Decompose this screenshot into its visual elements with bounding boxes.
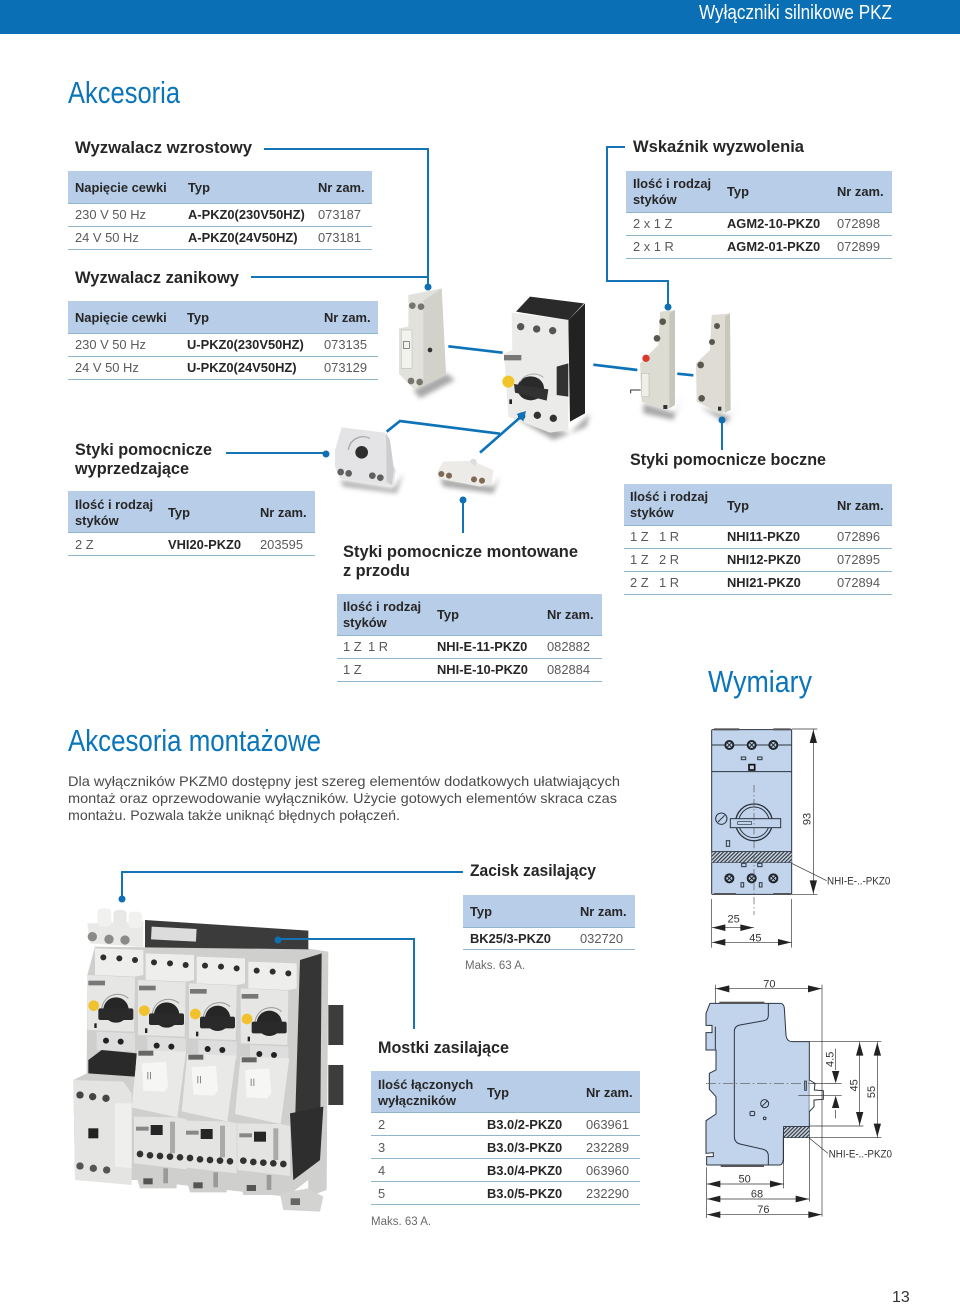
table: Styki pomocnicze montowane z przodu: Ilość i rodzaj [343, 599, 421, 614]
table: Wyzwalacz zanikowy: 230 V 50 Hz [75, 337, 146, 352]
leader: NHI-E-..-PKZ0: NHI-E-..-PKZ0 [829, 1149, 892, 1161]
paragraph [68, 773, 620, 823]
heading: Akcesoria montażowe: Akcesoria montażowe [68, 723, 321, 758]
dimension drawing: front view [712, 728, 890, 948]
heading: Styki pomocnicze boczne [630, 450, 826, 469]
table: Mostki zasilające: Maks. 63 A. [371, 1216, 431, 1228]
heading: Wskaźnik wyzwolenia [633, 137, 805, 156]
table: Wyzwalacz zanikowy: Napięcie cewki [75, 310, 167, 325]
table: Styki pomocnicze boczne: 1 R [659, 575, 679, 590]
title: Akcesoria: Akcesoria [68, 75, 181, 110]
switch side body [706, 1003, 809, 1165]
table: Wyzwalacz wzrostowy: Nr zam. [318, 180, 365, 195]
table: Mostki zasilające: B3.0/3-PKZ0 [487, 1140, 562, 1155]
photo: assembled motor starters [73, 908, 343, 1212]
dimensions: 4.5, 45, 55 [798, 1042, 881, 1138]
photo: side auxiliary contact left [631, 310, 675, 410]
table: Wyzwalacz zanikowy: U-PKZ0(24V50HZ) [187, 360, 297, 375]
table: Wyzwalacz zanikowy: U-PKZ0(230V50HZ) [187, 337, 304, 352]
header bar [0, 0, 960, 34]
table: Wskaźnik wyzwolenia: 072899 [837, 239, 880, 254]
dimensions: 4.5, 45, 55: 4.5 [824, 1052, 836, 1067]
table: Styki pomocnicze wyprzedzające: Typ [168, 505, 190, 520]
table: Zacisk zasilający: Typ [470, 904, 492, 919]
table: Styki pomocnicze wyprzedzające: Ilość i rodzaj [75, 497, 153, 512]
table: Mostki zasilające: B3.0/4-PKZ0 [487, 1163, 562, 1178]
table: Styki pomocnicze boczne: 1 Z [630, 552, 649, 567]
dimension: 70: 70 [763, 979, 775, 991]
heading: Mostki zasilające [378, 1038, 509, 1057]
dimensions: 4.5, 45, 55: 45 [848, 1079, 860, 1091]
table: Wyzwalacz wzrostowy: 24 V 50 Hz [75, 230, 139, 245]
table: Styki pomocnicze boczne: 072895 [837, 552, 880, 567]
table: Wyzwalacz zanikowy: 073129 [324, 360, 367, 375]
heading: Wyzwalacz zanikowy [75, 268, 240, 287]
table: Styki pomocnicze montowane z przodu: 082884 [547, 662, 590, 677]
table: Wyzwalacz wzrostowy: 230 V 50 Hz [75, 207, 146, 222]
table: Zacisk zasilający: Nr zam. [580, 904, 627, 919]
table: Wyzwalacz zanikowy: Typ [187, 310, 209, 325]
table: Styki pomocnicze montowane z przodu: 082882 [547, 639, 590, 654]
table: Styki pomocnicze wyprzedzające: Nr zam. [260, 505, 307, 520]
table: Styki pomocnicze montowane z przodu: 1 Z [343, 662, 362, 677]
table: Wskaźnik wyzwolenia: AGM2-10-PKZ0 [727, 216, 820, 231]
heading: Zacisk zasilający [470, 861, 597, 880]
heading: Styki pomocnicze [75, 440, 212, 459]
header title: Wyłączniki silnikowe PKZ [699, 2, 892, 24]
dimensions: 4.5, 45, 55: 55 [866, 1086, 878, 1098]
table: Styki pomocnicze boczne: 2 Z [630, 575, 649, 590]
table: Styki pomocnicze boczne [624, 450, 892, 594]
table: Wskaźnik wyzwolenia: Typ [727, 184, 749, 199]
paragraph: Dla wyłączników PKZM0 dostępny jest szereg elementów dodatkowych ułatwiających [68, 773, 620, 789]
table: Wyzwalacz wzrostowy: 073187 [318, 207, 361, 222]
contactor [73, 1050, 137, 1185]
table: Zacisk zasilający: Maks. 63 A. [465, 960, 525, 972]
table: Styki pomocnicze boczne: 072896 [837, 529, 880, 544]
table: Styki pomocnicze wyprzedzające: styków [75, 513, 120, 528]
hatched strip [712, 852, 792, 862]
table: Styki pomocnicze boczne: Ilość i rodzaj [630, 489, 708, 504]
photo: voltage release module [399, 288, 446, 390]
table: Mostki zasilające: B3.0/2-PKZ0 [487, 1117, 562, 1132]
table: Styki pomocnicze montowane z przodu: Typ [437, 607, 459, 622]
dimension: 93: 93 [802, 813, 814, 825]
table: Styki pomocnicze boczne: styków [630, 505, 675, 520]
starter columns [87, 948, 143, 1052]
power terminal [87, 908, 143, 947]
table: Wskaźnik wyzwolenia: Ilość i rodzaj [633, 176, 711, 191]
dimension: 93 [792, 729, 817, 894]
knob [736, 804, 772, 841]
leader: NHI-E-..-PKZ0 [809, 1138, 892, 1161]
table: Styki pomocnicze boczne: 1 Z [630, 529, 649, 544]
leader: NHI-E-..-PKZ0 [792, 863, 890, 887]
table: Zacisk zasilający: 032720 [580, 931, 623, 946]
table: Mostki zasilające: 5 [378, 1186, 385, 1201]
table: Styki pomocnicze montowane z przodu [337, 542, 602, 682]
table: Styki pomocnicze boczne: NHI12-PKZ0 [727, 552, 801, 567]
table: Styki pomocnicze montowane z przodu: 1 R [368, 639, 388, 654]
dimensions: 50, 68, 76: 50 [739, 1173, 751, 1185]
heading: Wyzwalacz wzrostowy [75, 138, 253, 157]
table: Mostki zasilające: 3 [378, 1140, 385, 1155]
table: Styki pomocnicze montowane z przodu: styków [343, 615, 388, 630]
dimensions: 50, 68, 76 [707, 1138, 822, 1218]
table: Styki pomocnicze wyprzedzające [68, 440, 315, 556]
dimensions: 25, 45 [712, 899, 792, 948]
lower covers and contactors [132, 1050, 187, 1188]
photo backing [73, 947, 308, 1197]
table: Styki pomocnicze wyprzedzające: 2 Z [75, 537, 94, 552]
photo shadows [413, 373, 738, 493]
leader: NHI-E-..-PKZ0: NHI-E-..-PKZ0 [827, 875, 890, 887]
table: Styki pomocnicze boczne: 1 R [659, 529, 679, 544]
table: Styki pomocnicze montowane z przodu: NHI-E-11-PKZ0 [437, 639, 527, 654]
dimension drawing: side view [706, 979, 892, 1218]
table: Mostki zasilające: 232289 [586, 1140, 629, 1155]
table: Styki pomocnicze wyprzedzające: 203595 [260, 537, 303, 552]
table: Styki pomocnicze montowane z przodu: Nr zam. [547, 607, 594, 622]
photo: PKZ motor switch [502, 297, 585, 433]
table: Wskaźnik wyzwolenia: AGM2-01-PKZ0 [727, 239, 820, 254]
dimensions: 50, 68, 76: 76 [757, 1204, 769, 1216]
connector lines [118, 147, 726, 1029]
photo: front auxiliary contact [437, 459, 493, 487]
switch body [712, 730, 792, 894]
table: Wyzwalacz wzrostowy: Typ [188, 180, 210, 195]
table: Wyzwalacz wzrostowy: A-PKZ0(24V50HZ) [188, 230, 298, 245]
table: Wskaźnik wyzwolenia: Nr zam. [837, 184, 884, 199]
table: Styki pomocnicze montowane z przodu: 1 Z [343, 639, 362, 654]
table: Styki pomocnicze boczne: Typ [727, 498, 749, 513]
table: Styki pomocnicze boczne: Nr zam. [837, 498, 884, 513]
table: Zacisk zasilający [463, 861, 635, 972]
photo: side auxiliary contact right [696, 313, 731, 413]
table: Mostki zasilające: Nr zam. [586, 1085, 633, 1100]
table: Wyzwalacz zanikowy [68, 268, 378, 380]
table: Styki pomocnicze montowane z przodu: z przodu [343, 561, 410, 580]
heading: Styki pomocnicze montowane [343, 542, 578, 561]
table: Mostki zasilające: 232290 [586, 1186, 629, 1201]
busbar [145, 920, 308, 949]
dimensions: 25, 45: 45 [749, 933, 761, 945]
photo: advance auxiliary contact [335, 427, 403, 493]
table: Mostki zasilające: wyłączników [377, 1093, 457, 1108]
DIN rail [290, 948, 343, 1197]
table: Styki pomocnicze boczne: NHI11-PKZ0 [727, 529, 800, 544]
table: Wskaźnik wyzwolenia: styków [633, 192, 678, 207]
table: Styki pomocnicze montowane z przodu: NHI-E-10-PKZ0 [437, 662, 528, 677]
heading: Wymiary: Wymiary [708, 664, 812, 699]
table: Mostki zasilające: 2 [378, 1117, 385, 1132]
table: Wskaźnik wyzwolenia: 2 x 1 R [633, 239, 674, 254]
table: Wyzwalacz zanikowy: 073135 [324, 337, 367, 352]
table: Mostki zasilające [371, 1038, 640, 1228]
table: Styki pomocnicze boczne: 072894 [837, 575, 880, 590]
table: Mostki zasilające: Typ [487, 1085, 509, 1100]
connector: module links [387, 346, 693, 453]
table: Wyzwalacz wzrostowy: A-PKZ0(230V50HZ) [188, 207, 305, 222]
table: Styki pomocnicze boczne: NHI21-PKZ0 [727, 575, 801, 590]
hatched strip [784, 1127, 809, 1138]
table: Styki pomocnicze wyprzedzające: wyprzedzające [74, 459, 189, 478]
table: Mostki zasilające: Ilość łączonych [378, 1077, 473, 1092]
table: Zacisk zasilający: BK25/3-PKZ0 [470, 931, 551, 946]
table: Mostki zasilające: 4 [378, 1163, 385, 1178]
dimension: 70 [715, 979, 822, 1217]
table: Styki pomocnicze boczne: 2 R [659, 552, 679, 567]
dimensions: 50, 68, 76: 68 [751, 1189, 763, 1201]
paragraph: montaż oraz oprzewodowanie wyłączników. Użycie gotowych elementów skraca czas [68, 790, 617, 806]
table: Mostki zasilające: B3.0/5-PKZ0 [487, 1186, 562, 1201]
table: Wyzwalacz zanikowy: Nr zam. [324, 310, 371, 325]
photo: accessories around the PKZ switch [387, 288, 738, 493]
table: Wyzwalacz wzrostowy: 073181 [318, 230, 361, 245]
table: Wyzwalacz zanikowy: 24 V 50 Hz [75, 360, 139, 375]
dimensions: 25, 45: 25 [728, 913, 740, 925]
table: Mostki zasilające: 063961 [586, 1117, 629, 1132]
table: Wskaźnik wyzwolenia [626, 137, 892, 258]
table: Wyzwalacz wzrostowy [68, 138, 372, 250]
table: Styki pomocnicze wyprzedzające: VHI20-PKZ0 [168, 537, 241, 552]
paragraph: montażu. Pozwala także uniknąć błędnych połączeń. [68, 807, 400, 823]
table: Wskaźnik wyzwolenia: 072898 [837, 216, 880, 231]
table: Mostki zasilające: 063960 [586, 1163, 629, 1178]
table: Wyzwalacz wzrostowy: Napięcie cewki [75, 180, 167, 195]
table: Wskaźnik wyzwolenia: 2 x 1 Z [633, 216, 673, 231]
